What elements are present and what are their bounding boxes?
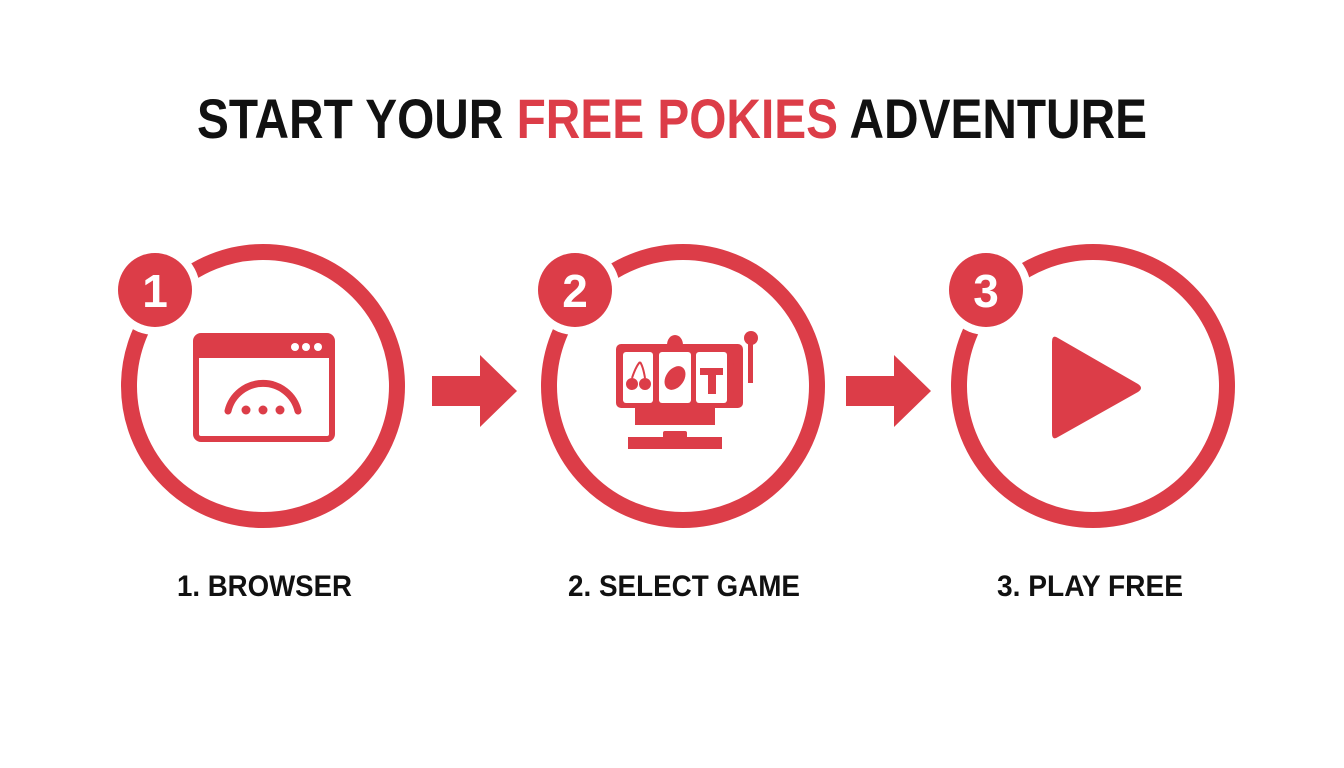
arrow 1 xyxy=(432,355,517,427)
title: START YOUR FREE POKIES ADVENTURE xyxy=(197,87,1147,150)
icon: slot machine xyxy=(616,331,758,449)
step 2: slot machine xyxy=(530,245,817,520)
label 1: 1. BROWSER xyxy=(177,570,352,603)
badge 2: 2 xyxy=(562,265,588,317)
badge 3 xyxy=(941,245,1031,335)
icon: browser window xyxy=(196,336,332,439)
badge 1 xyxy=(110,245,200,335)
step 3: play xyxy=(941,245,1227,520)
label 3: 3. PLAY FREE xyxy=(997,570,1183,603)
ring 3 xyxy=(959,252,1227,520)
label 2: 2. SELECT GAME xyxy=(568,570,800,603)
step 1: browser xyxy=(110,245,397,520)
badge 2 xyxy=(530,245,620,335)
ring 1 xyxy=(129,252,397,520)
icon: play triangle xyxy=(1052,337,1141,438)
ring 2 xyxy=(549,252,817,520)
badge 3: 3 xyxy=(973,265,999,317)
arrow 2 xyxy=(846,355,931,427)
badge 1: 1 xyxy=(142,265,168,317)
